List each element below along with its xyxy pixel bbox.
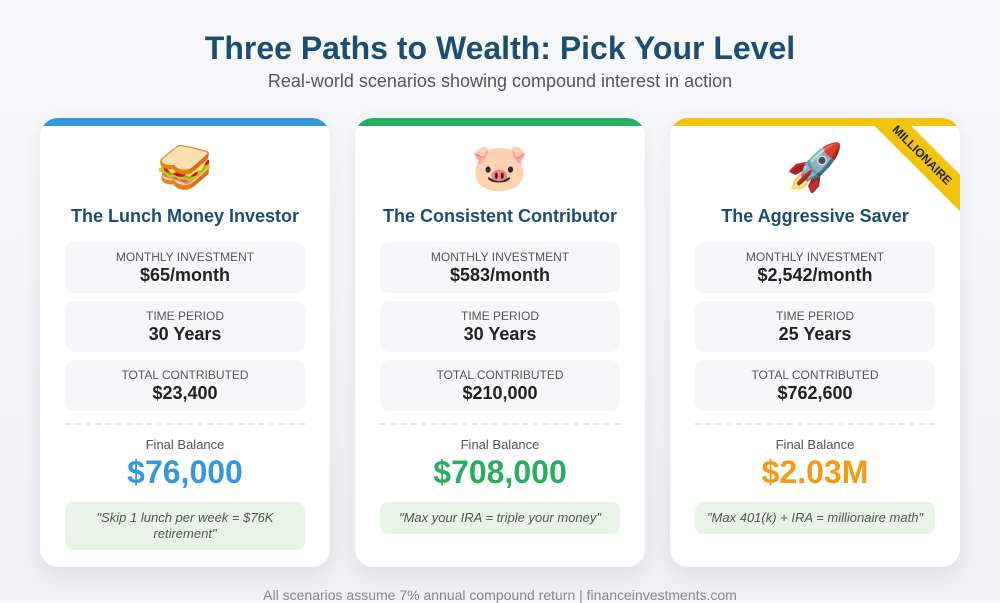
stat: total [380, 360, 620, 411]
stat: time: 25 Years [779, 324, 851, 344]
stat: total: $23,400 [152, 383, 218, 403]
stat: time [695, 301, 935, 352]
title: Three Paths to Wealth: Pick Your Level [205, 30, 795, 66]
stat: total: TOTAL CONTRIBUTED [751, 368, 879, 382]
stat: monthly [380, 242, 620, 293]
stat: monthly: MONTHLY INVESTMENT [116, 250, 254, 264]
final balance label: Final Balance [776, 437, 854, 452]
final balance label: Final Balance [461, 437, 539, 452]
stat: time: 30 Years [149, 324, 221, 344]
icon: sandwich: 🥪 [156, 141, 214, 193]
final balance label: Final Balance [146, 437, 224, 452]
quote [65, 502, 305, 550]
stat: total [695, 360, 935, 411]
quote: "Skip 1 lunch per week = $76K retirement" [96, 510, 273, 541]
stat: time: 30 Years [464, 324, 536, 344]
stat: time: TIME PERIOD [776, 309, 854, 323]
icon: rocket: 🚀 [786, 141, 844, 193]
stat: monthly [65, 242, 305, 293]
ribbon: millionaire [856, 89, 988, 221]
stat: time: TIME PERIOD [461, 309, 539, 323]
panel: aggressive saver [670, 118, 960, 567]
stat: total: TOTAL CONTRIBUTED [121, 368, 249, 382]
panel: lunch money investor [40, 118, 330, 567]
ribbon: millionaire: MILLIONAIRE [889, 122, 955, 188]
icon: pig: 🐷 [471, 141, 529, 193]
quote [380, 502, 620, 534]
final balance value: $76,000 [127, 454, 243, 490]
final balance value: $708,000 [433, 454, 567, 490]
stat: monthly: $65/month [140, 265, 230, 285]
stat: total: $210,000 [462, 383, 538, 403]
final balance value: $2.03M [762, 454, 868, 490]
stat: total: TOTAL CONTRIBUTED [436, 368, 564, 382]
stat: monthly: $2,542/month [757, 265, 873, 285]
quote: "Max 401(k) + IRA = millionaire math" [707, 510, 923, 525]
stat: monthly [695, 242, 935, 293]
stat: time: TIME PERIOD [146, 309, 224, 323]
heading: The Aggressive Saver [721, 206, 909, 226]
stat: monthly: MONTHLY INVESTMENT [746, 250, 884, 264]
panel: consistent contributor [355, 118, 645, 567]
footer: All scenarios assume 7% annual compound return | financeinvestments.com [263, 587, 737, 603]
stat: time [65, 301, 305, 352]
stat: monthly: MONTHLY INVESTMENT [431, 250, 569, 264]
heading: The Consistent Contributor [383, 206, 617, 226]
stat: monthly: $583/month [450, 265, 550, 285]
heading: The Lunch Money Investor [71, 206, 299, 226]
quote [695, 502, 935, 534]
quote: "Max your IRA = triple your money" [399, 510, 601, 525]
subtitle: Real-world scenarios showing compound interest in action [268, 71, 732, 91]
stat: total: $762,600 [777, 383, 853, 403]
stat: total [65, 360, 305, 411]
stat: time [380, 301, 620, 352]
